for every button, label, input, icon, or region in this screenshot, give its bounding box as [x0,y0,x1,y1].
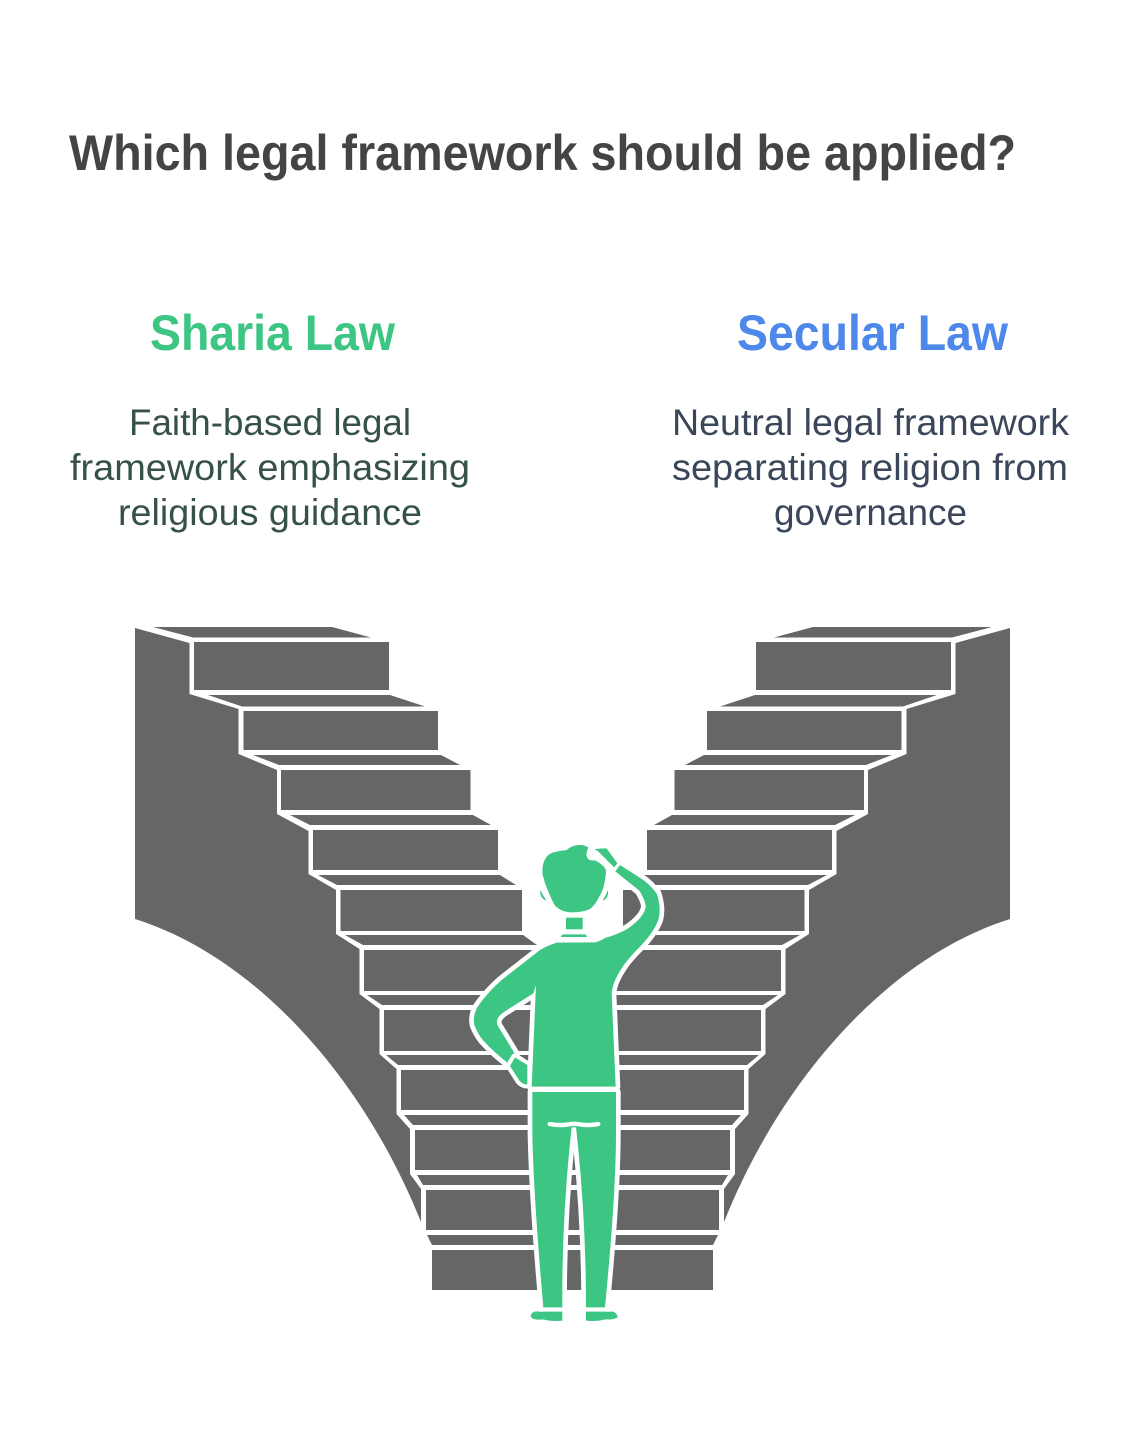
panel: secular law text [672,305,1069,533]
text block: Sharia Law description: religious guidance [118,492,422,533]
head [542,845,606,912]
belt line [550,1124,598,1125]
text block: Secular Law description: governance [774,492,967,533]
text block: Secular Law description [672,402,1069,533]
raised hand [595,848,617,868]
figure legs [531,1092,618,1321]
collar [561,934,587,937]
lower hand [510,1057,527,1084]
ears [540,890,547,901]
staircase: right path [572,627,1010,1290]
staircase: left path [135,627,573,1290]
heading: Sharia Law: Sharia Law [150,305,395,361]
figure: person scratching head [474,845,660,1321]
panel: sharia law text [70,305,470,533]
text block: Sharia Law description: Faith-based legal [129,402,411,443]
figure torso and arms [474,845,660,1087]
text block: Secular Law description: separating religion from [672,447,1068,488]
heading: Secular Law: Secular Law [737,305,1008,361]
shoes [531,1311,562,1321]
text block: Sharia Law description: framework emphasizing [70,447,470,488]
neck [566,918,583,929]
text block: Secular Law description: Neutral legal framework [672,402,1069,443]
text block: Sharia Law description [70,402,470,533]
title: Which legal framework should be applied? [69,125,1016,181]
